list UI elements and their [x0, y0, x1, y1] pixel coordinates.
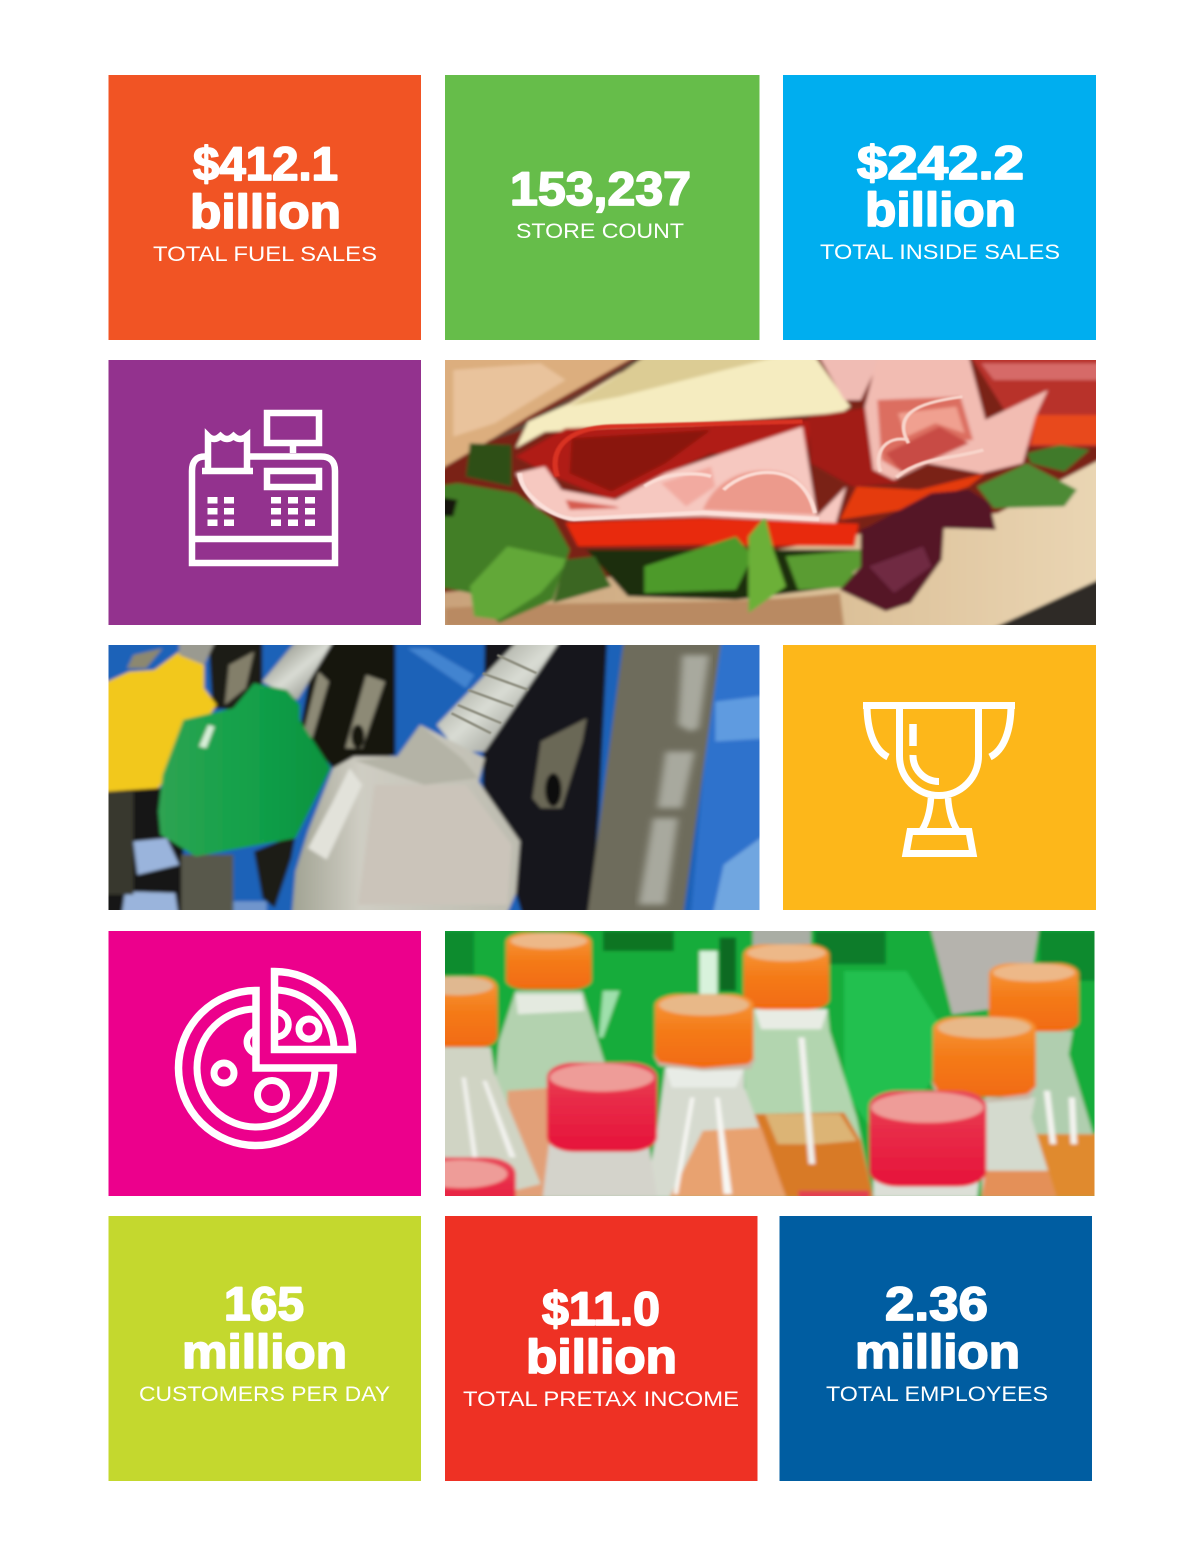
orange caps	[506, 933, 591, 989]
photo: sandwich	[445, 360, 1096, 625]
photo: fuel nozzles	[108, 645, 760, 910]
hose coils	[451, 655, 537, 733]
icon: pizza	[178, 972, 352, 1146]
stat: $11.0 billion	[526, 1282, 677, 1383]
icon: trophy	[863, 705, 1015, 854]
stat: 165 million: 165	[224, 1277, 304, 1330]
label: total pretax income: TOTAL PRETAX INCOME	[463, 1387, 739, 1411]
panel: trophy	[783, 645, 1096, 910]
label: total inside sales: TOTAL INSIDE SALES	[820, 240, 1060, 264]
label: store count: STORE COUNT	[516, 219, 684, 243]
panel: total fuel sales	[108, 75, 421, 340]
panel: cash register	[108, 360, 421, 625]
label: customers per day: CUSTOMERS PER DAY	[139, 1382, 390, 1406]
stat: $11.0 billion: billion	[526, 1330, 677, 1383]
label: total fuel sales: TOTAL FUEL SALES	[153, 242, 377, 266]
stat: 2.36 million: million	[855, 1325, 1020, 1378]
panel: customers per day	[108, 1216, 421, 1481]
stat: $11.0 billion: $11.0	[542, 1282, 660, 1335]
stat: 2.36 million: 2.36	[885, 1277, 988, 1330]
stat: $242.2 billion: $242.2	[857, 136, 1024, 189]
icon: cash register	[192, 413, 335, 563]
stat: $412.1 billion: $412.1	[193, 137, 338, 190]
panel: total pretax income	[445, 1216, 758, 1481]
stat: 165 million	[182, 1277, 347, 1378]
photo: soda bottles	[445, 931, 1094, 1196]
stat: 2.36 million	[855, 1277, 1020, 1378]
panel: total inside sales	[783, 75, 1096, 340]
pole highlight	[639, 655, 709, 905]
panel: store count	[445, 75, 760, 340]
stat: 153,237: 153,237	[510, 162, 691, 215]
stat: $412.1 billion	[190, 137, 341, 238]
panel: total employees	[780, 1216, 1092, 1481]
red caps	[547, 1063, 657, 1152]
stat: $242.2 billion	[857, 136, 1024, 236]
stat: $412.1 billion: billion	[190, 185, 341, 238]
panel: pizza	[108, 931, 421, 1196]
stat: $242.2 billion: billion	[865, 183, 1016, 236]
label: total employees: TOTAL EMPLOYEES	[826, 1382, 1048, 1406]
stat: 165 million: million	[182, 1325, 347, 1378]
ham and salami fold details	[520, 397, 983, 519]
